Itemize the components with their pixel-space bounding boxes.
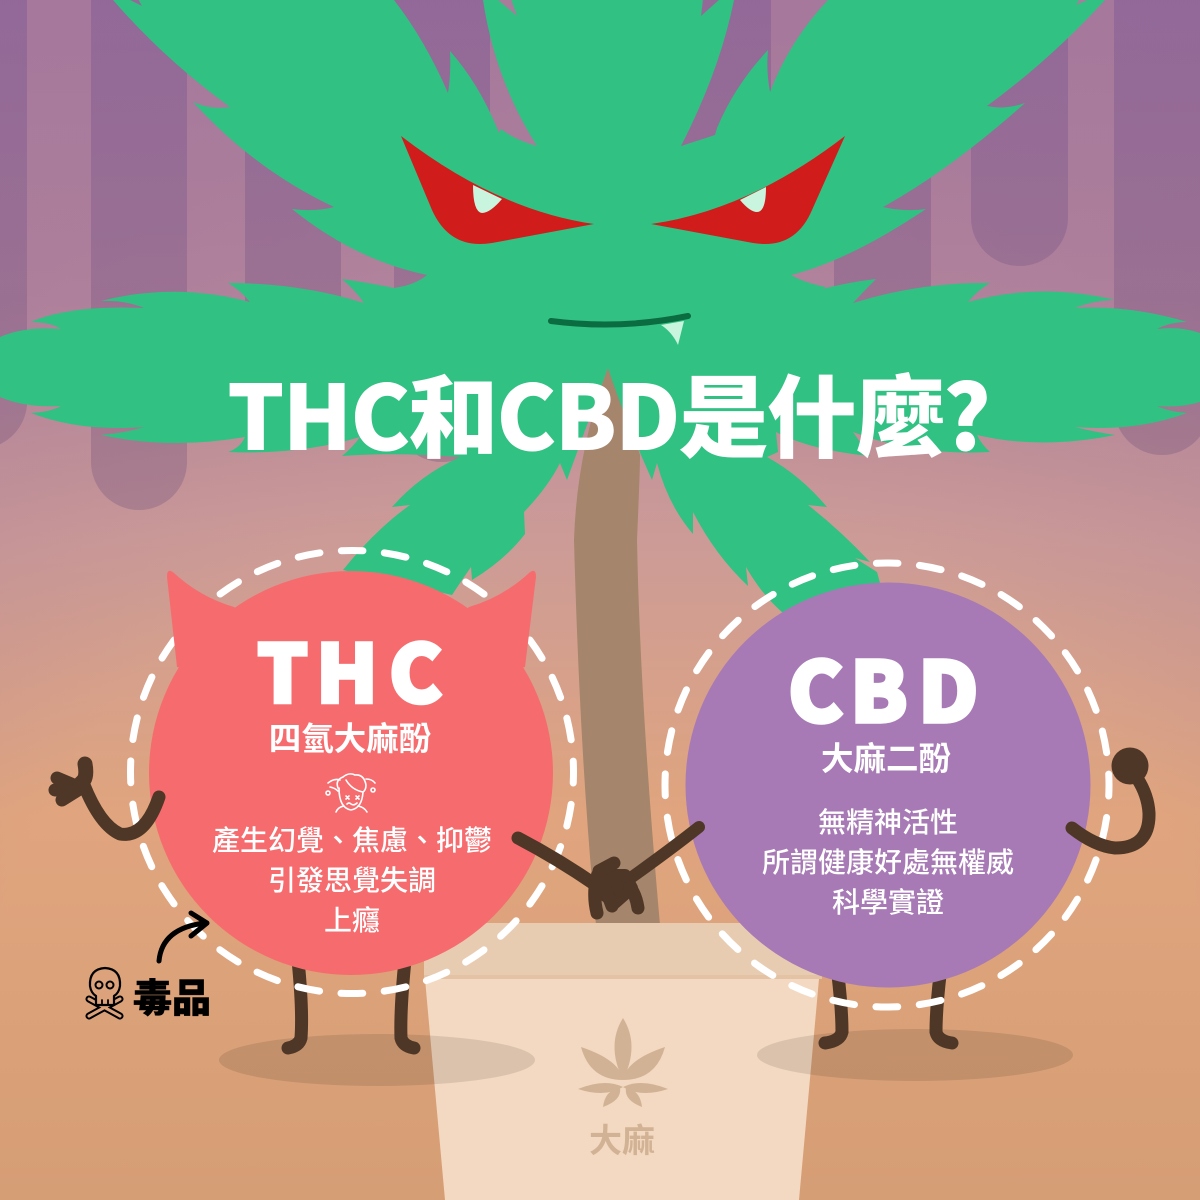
left eye	[401, 136, 594, 244]
title: THC和CBD是什麼?	[227, 346, 991, 476]
ground shadow CBD	[757, 1029, 1073, 1081]
mouth and fang	[551, 316, 688, 345]
CBD effects text	[762, 801, 1014, 921]
CBD effects text: 科學實證	[832, 881, 944, 921]
arrow to THC	[159, 913, 207, 961]
clasped hands	[595, 863, 638, 913]
CBD effects text: 無精神活性	[818, 801, 958, 841]
CBD character body	[686, 582, 1090, 988]
CBD left arm	[625, 827, 699, 882]
right eye	[651, 136, 845, 244]
THC effects text: 引發思覺失調	[268, 859, 436, 899]
CBD dashed ring	[665, 563, 1109, 1007]
THC effects text: 產生幻覺、焦慮、抑鬱	[212, 819, 492, 859]
THC effects text: 上癮	[324, 899, 380, 939]
THC legs	[288, 960, 414, 1048]
pot logo text: 大麻	[589, 1114, 655, 1162]
pot	[424, 923, 822, 1200]
CBD right arm and fist	[1072, 748, 1149, 848]
THC chinese name: 四氫大麻酚	[269, 713, 431, 760]
THC heading: THC	[257, 610, 442, 726]
CBD legs	[825, 975, 952, 1043]
CBD chinese name: 大麻二酚	[821, 733, 951, 780]
background stripes	[0, 0, 1200, 510]
THC dashed ring	[130, 550, 574, 994]
leaf edge notches at top	[128, 0, 1090, 16]
icon: skull and crossbones	[89, 968, 120, 1016]
pot logo leaf	[578, 1018, 668, 1107]
ground shadow THC	[219, 1034, 535, 1086]
THC character body	[149, 571, 553, 975]
CBD effects text: 所謂健康好處無權威	[762, 841, 1014, 881]
icon: dizzy face	[326, 774, 375, 812]
THC left arm and hand	[55, 764, 159, 834]
CBD heading: CBD	[788, 626, 979, 746]
THC right arm	[518, 838, 600, 888]
trunk	[574, 368, 660, 925]
THC effects text	[212, 819, 492, 939]
cannabis plant head	[0, 0, 1200, 613]
label: drugs: 毒品	[133, 968, 211, 1024]
